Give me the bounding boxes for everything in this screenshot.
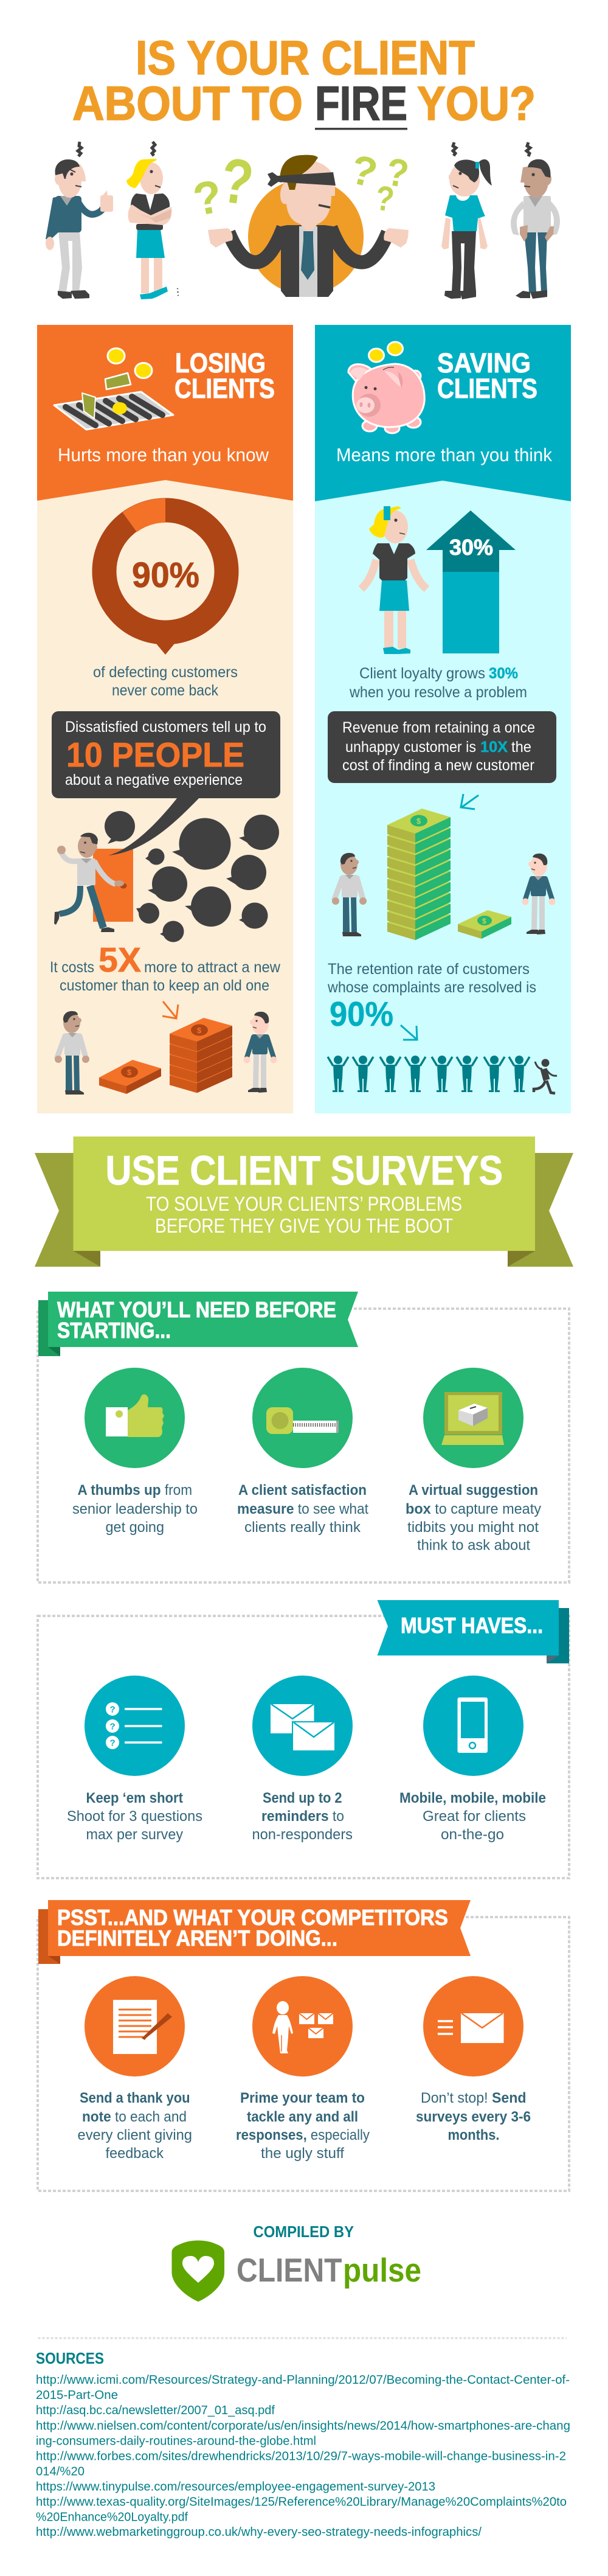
text: client loyalty: when you resolve a problem	[349, 684, 527, 701]
heading: saving clients	[437, 347, 537, 404]
logo: compiled by clientpulse: COMPILED BY	[253, 2223, 354, 2241]
text: satisfaction measure: measure to see what	[237, 1501, 368, 1517]
banner: use client surveys: TO SOLVE YOUR CLIENTS’ PROBLEMS	[146, 1192, 462, 1215]
icon: thumbs up	[85, 1368, 185, 1468]
source list: 2015-Part-One	[36, 2389, 118, 2402]
text: suggestion box	[406, 1482, 541, 1554]
callout: 10 people: about a negative experience	[65, 771, 243, 788]
text: don't stop: months.	[447, 2127, 500, 2143]
sources: SOURCES	[36, 2349, 104, 2367]
ribbon heading: STARTING...	[57, 1318, 171, 1343]
text: send reminders: reminders to	[261, 1808, 344, 1825]
icon: laptop suggestion box	[423, 1368, 523, 1468]
text: don't stop: Don’t stop! Send	[421, 2090, 527, 2106]
donut chart: 90 percent	[105, 498, 226, 655]
arrow: teal down	[401, 1025, 417, 1040]
source list: http://www.icmi.com/Resources/Strategy-and-Planning/2012/07/Becoming-the-Contact-Center-of-	[36, 2373, 570, 2387]
title: YOU?	[417, 76, 536, 130]
text: satisfaction measure: clients really think	[244, 1519, 361, 1536]
text: keep em short: max per survey	[86, 1826, 183, 1843]
icon: two envelopes	[252, 1676, 353, 1776]
text: mobile: Great for clients	[423, 1808, 526, 1825]
text: keep em short: Shoot for 3 questions	[67, 1808, 202, 1825]
callout: revenue	[328, 711, 556, 783]
illustration: woman	[361, 506, 427, 654]
illustration: tall stack of bills and man: $	[416, 816, 421, 826]
text: thumbs up	[72, 1482, 198, 1536]
text: don't stop: surveys every 3-6	[416, 2109, 531, 2125]
text: thumbs up: A thumbs up from	[78, 1482, 192, 1499]
banner: use client surveys: BEFORE THEY GIVE YOU THE BOOT	[155, 1214, 453, 1237]
text: it costs 5X: customer than to keep an old one	[60, 977, 269, 994]
text: retention rate: whose complaints are resolved is	[327, 979, 536, 996]
illustration: small pile of bills and man	[458, 854, 556, 939]
text: it costs 5X: 5X	[98, 941, 141, 980]
illustration: man and tall stack of money	[170, 1012, 277, 1093]
illustration: man and small pile of money	[55, 1011, 161, 1095]
heading: saving clients: CLIENTS	[437, 373, 537, 404]
person: blindfolded manager	[208, 155, 409, 297]
text: defecting customers: of defecting customers	[93, 664, 238, 681]
source list: http://asq.bc.ca/newsletter/2007_01_asq.pdf	[36, 2404, 275, 2417]
text: client loyalty: 30%	[489, 665, 518, 682]
text: send reminders	[252, 1790, 353, 1843]
text: satisfaction measure	[237, 1482, 368, 1536]
callout: revenue: cost of finding a new customer	[342, 757, 534, 774]
question marks	[189, 145, 412, 226]
icon: short question list: ?	[109, 1738, 116, 1749]
panel: losing clients	[37, 325, 293, 1113]
ribbon heading: WHAT YOU’LL NEED BEFORE	[57, 1297, 336, 1322]
subheading: Hurts more than you know	[58, 444, 269, 465]
sources	[36, 2349, 570, 2539]
text: mobile	[399, 1790, 546, 1843]
text: thank you note	[78, 2090, 192, 2162]
title: IS YOUR CLIENT	[136, 30, 475, 85]
banner: use client surveys	[35, 1137, 573, 1267]
icon: thank you note	[85, 1976, 185, 2076]
callout: revenue: the	[511, 739, 531, 756]
text: defecting customers: never come back	[112, 682, 218, 699]
panel: must haves	[38, 1600, 569, 1878]
source list: https://www.tinypulse.com/resources/employee-engagement-survey-2013	[36, 2480, 435, 2493]
question marks: ?	[216, 145, 257, 219]
text: retention rate: 90%	[330, 995, 393, 1034]
text: thank you note: note to each and	[82, 2109, 187, 2125]
text: defecting customers	[93, 664, 238, 699]
callout: revenue: Revenue from retaining a once	[342, 719, 535, 736]
logo: compiled by clientpulse	[171, 2223, 421, 2302]
text: thank you note: Send a thank you	[80, 2090, 190, 2106]
text: thumbs up: get going	[106, 1519, 164, 1536]
illustration: door and man running	[54, 798, 199, 932]
icon: short question list	[85, 1676, 185, 1776]
text: thank you note: every client giving	[78, 2127, 192, 2143]
arrow: orange	[162, 1001, 178, 1018]
text: prime your team: the ugly stuff	[261, 2145, 344, 2162]
source list: %20Enhance%20Loyalty.pdf	[36, 2510, 188, 2524]
text: client loyalty: Client loyalty grows	[359, 665, 485, 682]
callout: 10 people: Dissatisfied customers tell up to	[65, 719, 266, 736]
panel header: losing clients	[37, 325, 293, 501]
title: ABOUT TO	[72, 76, 303, 130]
subheading: Means more than you think	[336, 444, 552, 465]
icon: moving envelope	[423, 1976, 523, 2076]
pictogram: 8 cheering customers and one leaving	[328, 1056, 557, 1093]
text: mobile: Mobile, mobile, mobile	[399, 1790, 546, 1806]
ribbon heading	[377, 1600, 569, 1663]
source list: 014/%20	[36, 2465, 85, 2479]
icon: money falling into a drain	[54, 348, 173, 430]
callout: 10 people	[52, 711, 280, 855]
question marks: ?	[189, 170, 226, 226]
text: it costs 5X: more to attract a new	[144, 959, 281, 976]
panel: what you'll need before starting	[38, 1292, 569, 1582]
person: man giving thumbs up	[46, 142, 113, 299]
question marks: ?	[384, 150, 412, 196]
source list: ing-consumers-daily-routines-around-the-globe.html	[36, 2435, 316, 2448]
illustration: small pile of bills and man: $	[482, 917, 486, 925]
text: it costs 5X	[50, 941, 281, 994]
icon: measuring tape	[252, 1368, 353, 1468]
source list: http://www.webmarketinggroup.co.uk/why-every-seo-strategy-needs-infographics/	[36, 2526, 482, 2539]
ribbon heading: DEFINITELY AREN’T DOING...	[57, 1926, 337, 1951]
text: mobile: on-the-go	[441, 1826, 504, 1843]
panel: what your competitors aren't doing	[38, 1900, 569, 2191]
logo: compiled by clientpulse: CLIENT	[237, 2251, 342, 2289]
callout: revenue: unhappy customer is	[345, 739, 476, 756]
person: woman with crossed arms	[126, 142, 179, 299]
text: thank you note: feedback	[106, 2145, 164, 2162]
arrow chart: 30 percent	[426, 510, 516, 653]
logo: compiled by clientpulse: pulse	[343, 2251, 421, 2289]
text: thumbs up: senior leadership to	[72, 1501, 198, 1517]
arrow chart: 30 percent: 30%	[449, 535, 493, 560]
heading: saving clients: SAVING	[437, 347, 531, 378]
illustration: angry clients around a blindfolded manager	[46, 142, 560, 299]
title: FIRE	[315, 76, 407, 130]
text: prime your team: Prime your team to	[240, 2090, 365, 2106]
source list: http://www.texas-quality.org/SiteImages/125/Reference%20Library/Manage%20Complaints%20to	[36, 2496, 567, 2509]
question marks: ?	[346, 146, 382, 197]
callout: 10 people: 10 PEOPLE	[66, 736, 244, 775]
title	[72, 30, 536, 130]
person: man with hands in pockets	[511, 142, 560, 299]
ribbon heading	[38, 1292, 358, 1356]
text: prime your team: tackle any and all	[247, 2109, 358, 2125]
source list	[36, 2373, 570, 2539]
illustration: man and tall stack of money: $	[197, 1026, 202, 1035]
text: prime your team	[236, 2090, 370, 2162]
callout: revenue: 10X	[480, 739, 508, 756]
ribbon heading	[38, 1900, 471, 1964]
panel header: saving clients	[315, 325, 571, 501]
source list: http://www.forbes.com/sites/drewhendricks/2013/10/29/7-ways-mobile-will-change-business-in-2	[36, 2449, 566, 2463]
text: retention rate: The retention rate of customers	[328, 961, 530, 978]
ribbon heading: MUST HAVES...	[401, 1613, 543, 1638]
text: suggestion box: tidbits you might not	[407, 1519, 539, 1536]
text: suggestion box: A virtual suggestion	[409, 1482, 538, 1499]
text: send reminders: non-responders	[252, 1826, 353, 1843]
donut chart: 90 percent: 90%	[132, 555, 199, 595]
text: send reminders: Send up to 2	[263, 1790, 342, 1806]
source list: http://www.nielsen.com/content/corporate/us/en/insights/news/2014/how-smartphones-are-chang	[36, 2419, 570, 2432]
illustration: man and small pile of money: $	[127, 1068, 132, 1077]
ribbon heading: PSST...AND WHAT YOUR COMPETITORS	[57, 1905, 448, 1930]
text: suggestion box: think to ask about	[417, 1537, 530, 1554]
panel: saving clients	[315, 325, 571, 1113]
icon: short question list: ?	[109, 1705, 116, 1714]
heading: losing clients: LOSING	[175, 347, 266, 378]
text: suggestion box: box to capture meaty	[406, 1501, 541, 1517]
text: satisfaction measure: A client satisfaction	[238, 1482, 367, 1499]
icon: mobile phone	[423, 1676, 523, 1776]
text: prime your team: responses, especially	[236, 2127, 370, 2143]
speech bubbles	[105, 811, 279, 942]
text: don't stop	[416, 2090, 531, 2143]
icon: person and envelopes	[252, 1976, 353, 2076]
icon: shield with heart	[171, 2240, 224, 2302]
arrow: teal	[461, 794, 478, 809]
heading: losing clients: CLIENTS	[174, 373, 275, 404]
icon: piggy bank	[348, 342, 424, 433]
person: woman with ponytail	[441, 142, 492, 299]
text: it costs 5X: It costs	[50, 959, 94, 976]
text: client loyalty	[349, 665, 527, 701]
illustration: tall stack of bills and man	[332, 809, 451, 940]
banner: use client surveys: USE CLIENT SURVEYS	[106, 1147, 503, 1194]
question marks: ?	[373, 178, 396, 220]
text: keep em short	[67, 1790, 202, 1843]
text: keep em short: Keep ‘em short	[86, 1790, 183, 1806]
heading: losing clients	[174, 347, 275, 404]
text: retention rate	[327, 961, 536, 1034]
icon: short question list: ?	[109, 1722, 116, 1732]
